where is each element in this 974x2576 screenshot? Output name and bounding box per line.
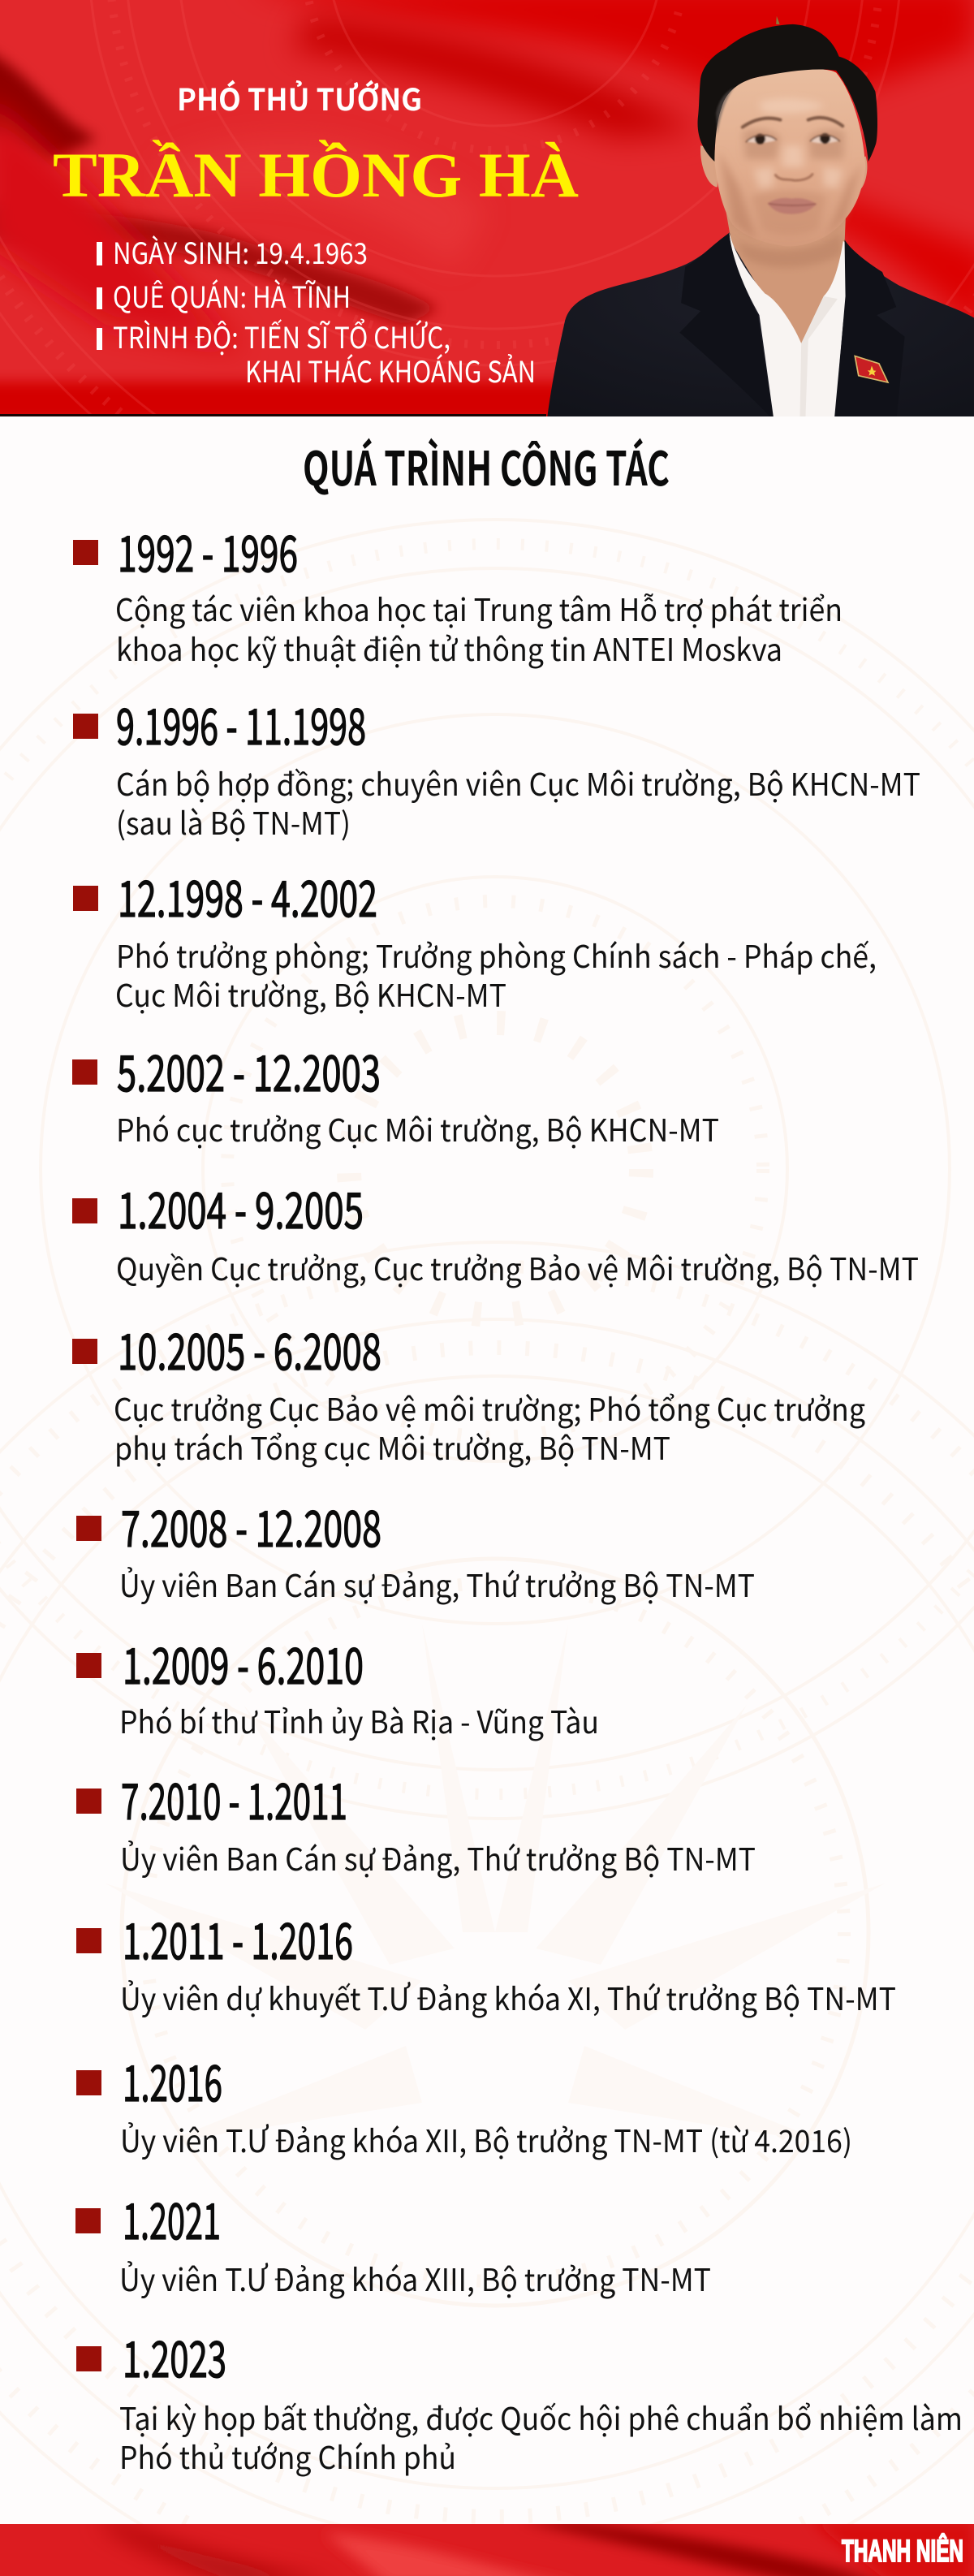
ears [700,145,867,190]
timeline item 1.2021 [75,2181,711,2300]
timeline item 9.1996-11.1998 [73,687,920,844]
biography facts [97,231,536,391]
name title: TRẦN HỒNG HÀ [53,140,579,210]
timeline item 7.2008-12.2008: Ủy viên Ban Cán sự Đảng, Thứ trưởng Bộ TN-MT [119,1561,755,1606]
timeline item 10.2005-6.2008: 10.2005 - 6.2008 [118,1312,381,1384]
hair grey temple [716,88,735,135]
timeline item 1.2011-1.2016 [76,1901,896,2019]
timeline item 1.2023: Phó thủ tướng Chính phủ [119,2433,456,2478]
timeline item 1992-1996: Cộng tác viên khoa học tại Trung tâm Hỗ trợ phát triển [115,585,843,630]
hair wisp [776,16,780,24]
timeline item 1.2004-9.2005: Quyền Cục trưởng, Cục trưởng Bảo vệ Môi trường, Bộ TN-MT [116,1245,919,1289]
timeline item 5.2002-12.2003: Phó cục trưởng Cục Môi trường, Bộ KHCN-MT [116,1106,719,1150]
timeline item 1.2009-6.2010 [76,1626,599,1742]
section heading: QUÁ TRÌNH CÔNG TÁC [303,431,670,499]
neck shadow [735,237,846,266]
timeline item 7.2010-1.2011 [76,1762,756,1879]
eyes and brows [743,118,843,144]
footer red flag band [0,2521,974,2576]
timeline item 7.2008-12.2008 [76,1489,755,1606]
timeline item 12.1998-4.2002: 12.1998 - 4.2002 [118,859,377,931]
timeline item 1.2016: 1.2016 [123,2043,222,2116]
timeline item 1.2004-9.2005 [72,1171,919,1289]
timeline item 12.1998-4.2002 [73,859,877,1016]
biography facts: TRÌNH ĐỘ: TIẾN SĨ TỔ CHỨC, [113,315,450,357]
portrait of Trần Hồng Hà [547,16,974,420]
timeline item 1.2023 [76,2319,963,2478]
timeline item 5.2002-12.2003: 5.2002 - 12.2003 [117,1033,381,1106]
timeline item 1.2021: Ủy viên T.Ư Đảng khóa XIII, Bộ trưởng TN-MT [119,2255,711,2300]
timeline item 1.2004-9.2005: 1.2004 - 9.2005 [118,1171,364,1243]
hair [698,24,877,162]
timeline item 1992-1996: 1992 - 1996 [118,514,298,586]
suit jacket [547,232,974,420]
biography facts: NGÀY SINH: 19.4.1963 [113,231,368,273]
timeline item 1.2016 [76,2043,852,2161]
timeline item 1.2009-6.2010: 1.2009 - 6.2010 [123,1626,364,1698]
shirt shadow [799,296,838,420]
subtitle: PHÓ THỦ TƯỚNG [177,76,422,119]
timeline item 1.2023: 1.2023 [123,2319,226,2392]
header banner: red flag background [0,0,974,416]
timeline item 9.1996-11.1998: 9.1996 - 11.1998 [116,687,366,759]
national assembly pin [855,356,888,382]
timeline item 1.2011-1.2016: Ủy viên dự khuyết T.Ư Đảng khóa XI, Thứ trưởng Bộ TN-MT [120,1974,896,2019]
nose [775,175,812,180]
face shading [719,98,863,239]
face [714,70,865,224]
shirt and collar [729,232,847,420]
timeline item 9.1996-11.1998: (sau là Bộ TN-MT) [116,799,351,844]
timeline item 12.1998-4.2002: Phó trưởng phòng; Trưởng phòng Chính sách - Pháp chế, [116,932,877,977]
timeline item 1.2011-1.2016: 1.2011 - 1.2016 [123,1901,353,1974]
timeline item 10.2005-6.2008 [72,1312,865,1469]
timeline item 5.2002-12.2003 [72,1033,719,1150]
biography facts: QUÊ QUÁN: HÀ TĨNH [113,274,351,317]
timeline item 1.2009-6.2010: Phó bí thư Tỉnh ủy Bà Rịa - Vũng Tàu [119,1698,599,1742]
timeline item 7.2010-1.2011: Ủy viên Ban Cán sự Đảng, Thứ trưởng Bộ TN-MT [120,1835,756,1879]
timeline item 1.2016: Ủy viên T.Ư Đảng khóa XII, Bộ trưởng TN-MT (từ 4.2016) [120,2116,852,2161]
biography facts: KHAI THÁC KHOÁNG SẢN [245,349,536,391]
timeline item 12.1998-4.2002: Cục Môi trường, Bộ KHCN-MT [115,971,506,1016]
timeline item 10.2005-6.2008: Cục trưởng Cục Bảo vệ môi trường; Phó tổng Cục trưởng [114,1385,865,1430]
lapels [680,234,904,383]
timeline item 1992-1996: khoa học kỹ thuật điện tử thông tin ANTEI Moskva [116,625,782,670]
timeline item 1.2021: 1.2021 [123,2181,221,2254]
timeline item 10.2005-6.2008: phụ trách Tổng cục Môi trường, Bộ TN-MT [114,1424,670,1469]
mouth [768,198,817,214]
neck [726,210,846,345]
timeline item 7.2008-12.2008: 7.2008 - 12.2008 [121,1489,381,1561]
timeline item 9.1996-11.1998: Cán bộ hợp đồng; chuyên viên Cục Môi trường, Bộ KHCN-MT [116,760,920,805]
timeline item 1992-1996 [73,514,843,670]
timeline item 7.2010-1.2011: 7.2010 - 1.2011 [121,1762,347,1834]
